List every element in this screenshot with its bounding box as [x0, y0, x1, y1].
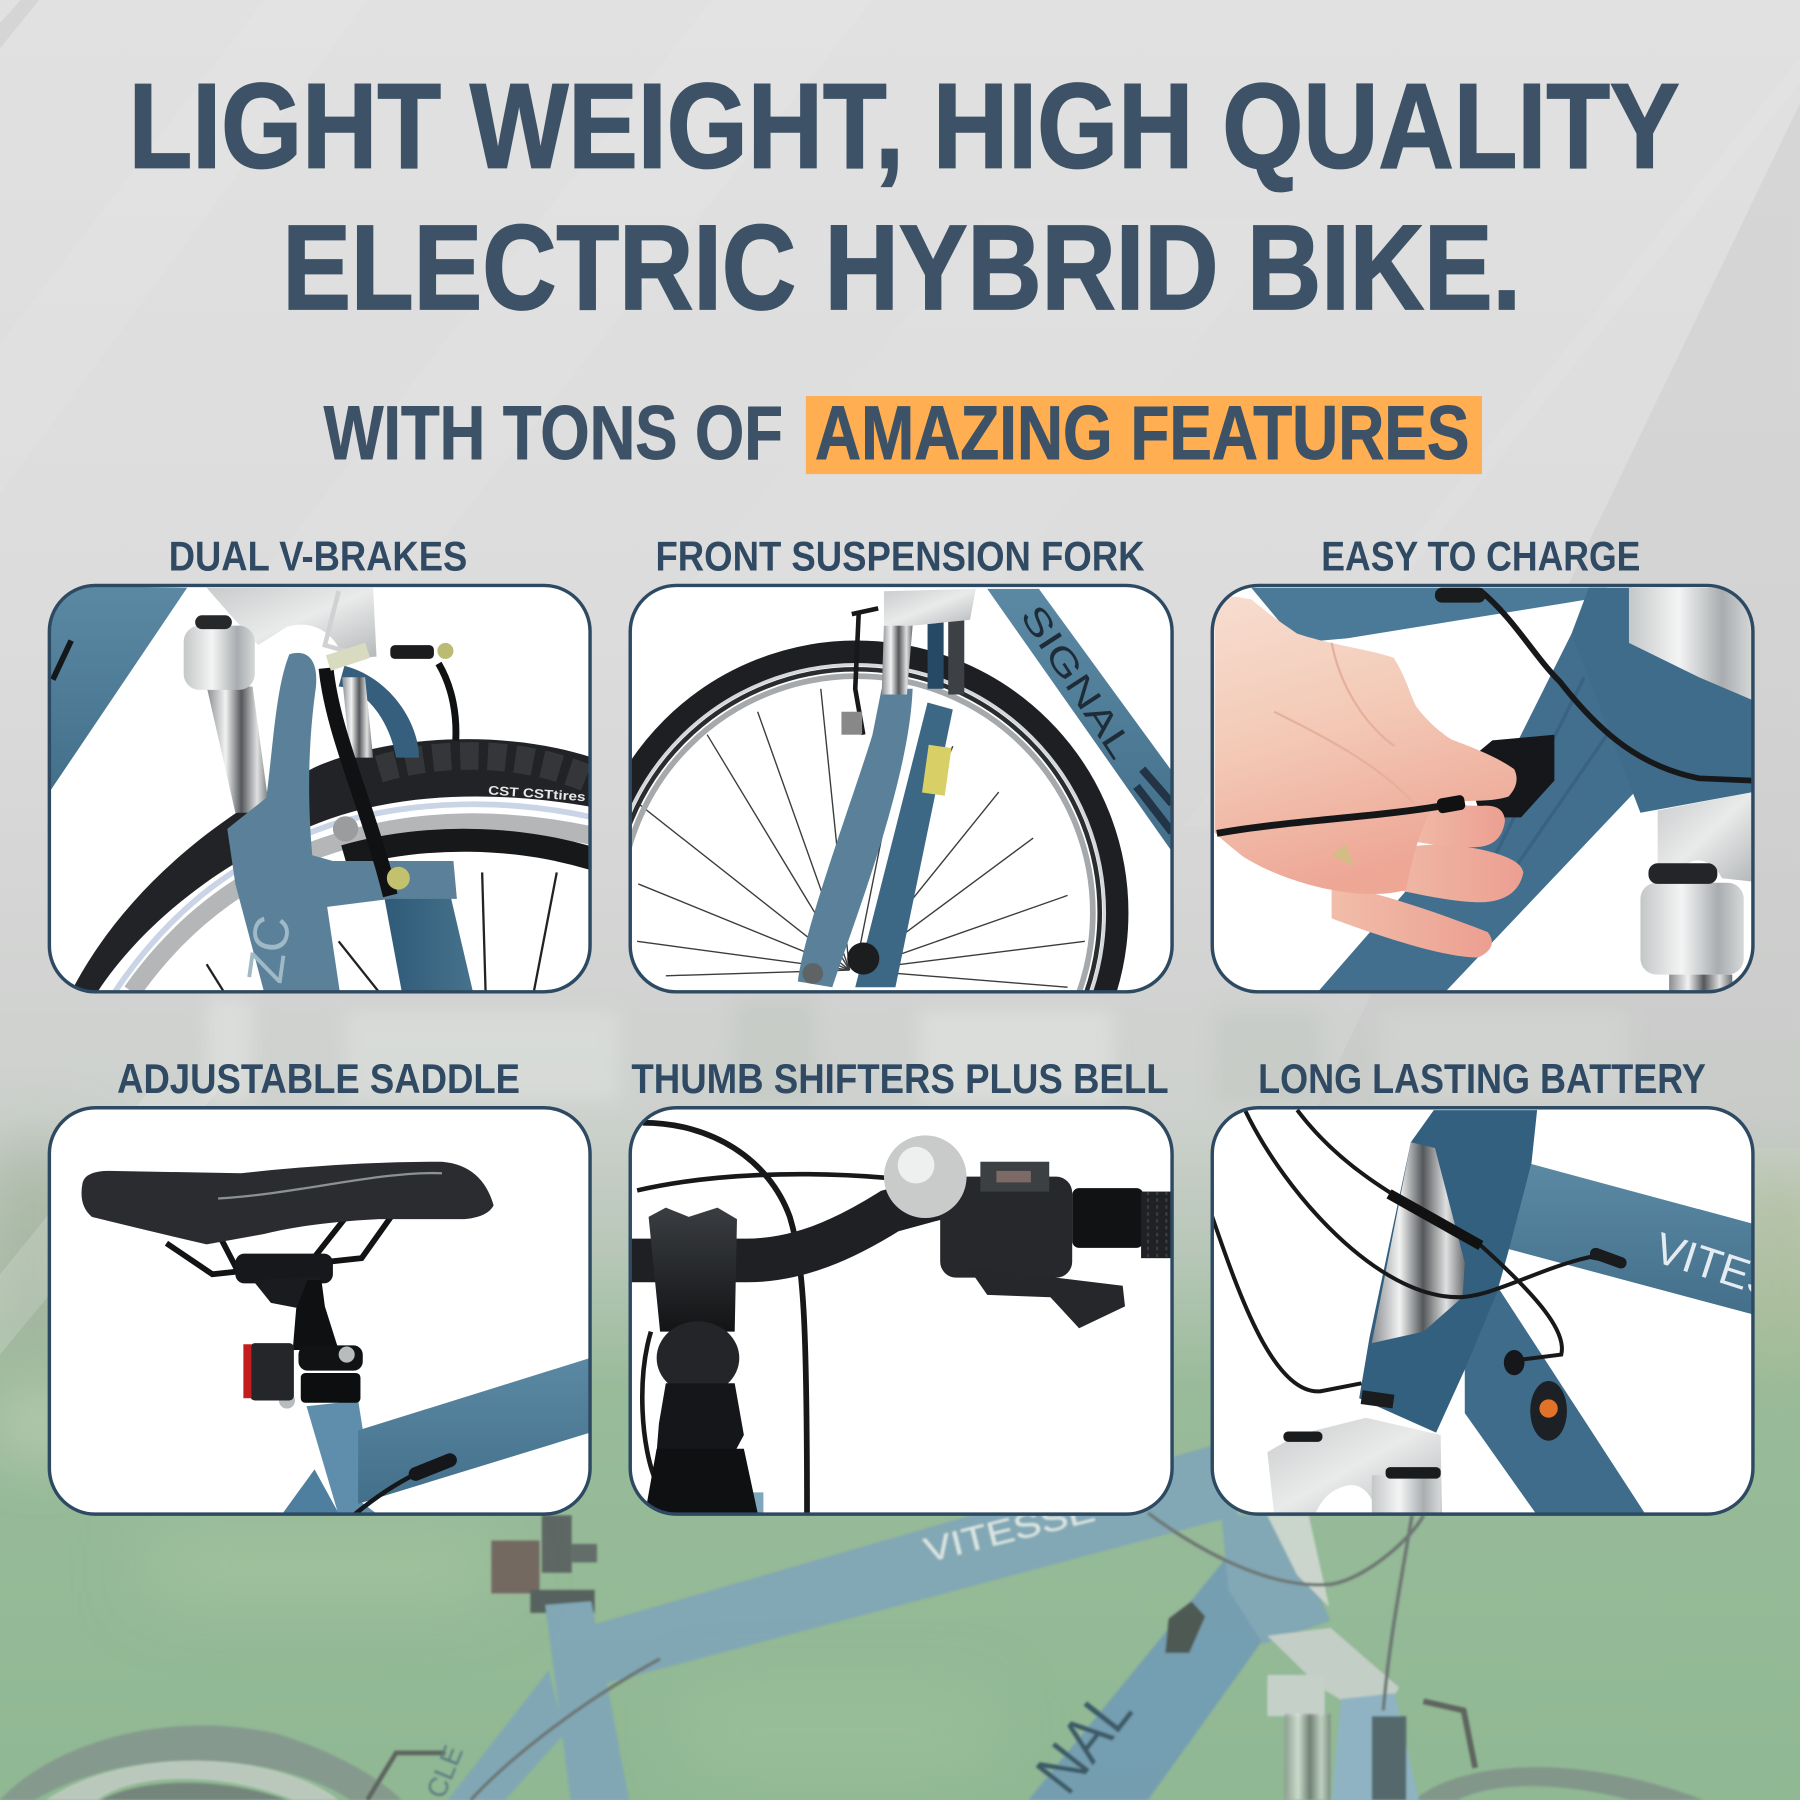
photo: saddle, seat post and frame: [82, 1162, 590, 1515]
photo: head tube, battery indicator and cables: VITES: [1649, 1224, 1784, 1309]
panel: easy to charge: [1212, 534, 1753, 998]
card background: [49, 1108, 590, 1514]
middle finger: [1402, 844, 1524, 902]
back of hand and thumb: [1215, 596, 1517, 894]
card border: [1212, 585, 1753, 992]
brake lever arm rear: [367, 1753, 445, 1800]
front wheel tyre: [1414, 1767, 1704, 1800]
heading: DUAL V-BRAKES: [169, 534, 467, 580]
card background: [630, 585, 1172, 992]
card border: [1212, 1108, 1753, 1514]
brake arm front: [1423, 1701, 1475, 1768]
subtitle: [324, 391, 1482, 476]
photo: fork, brake and tyre: CST CSTtires: [488, 783, 586, 804]
panel: front suspension fork: [628, 542, 1174, 994]
photo: fork, brake and tyre: [49, 585, 592, 992]
top tube: [595, 1444, 1238, 1685]
highlighted text: AMAZING FEATURES: [815, 391, 1469, 476]
photo: hand plugging charger into frame: [1215, 588, 1753, 998]
index finger: [1418, 806, 1505, 848]
panel: long lasting battery: [1212, 1056, 1784, 1521]
rear wheel tyre and rim: [0, 1726, 402, 1800]
pinky and ring fingers: [1332, 884, 1492, 957]
heading: THUMB SHIFTERS PLUS BELL: [631, 1056, 1169, 1102]
heading: EASY TO CHARGE: [1321, 534, 1640, 580]
heading: FRONT SUSPENSION FORK: [655, 534, 1145, 580]
subtitle lead text: WITH TONS OF: [324, 391, 783, 476]
photo: handlebar, stem, bell and shifter: [630, 1123, 1173, 1515]
card border: [49, 585, 590, 992]
orange highlight box: [806, 396, 1482, 474]
card border: [49, 1108, 590, 1514]
card background: [49, 585, 590, 992]
card border: [630, 1108, 1172, 1514]
charge port: [1165, 1601, 1205, 1653]
title line 2: ELECTRIC HYBRID BIKE.: [282, 200, 1521, 335]
card background: [630, 1108, 1172, 1514]
frame logo VITESSE: VITESSE: [920, 1491, 1099, 1570]
photo: front wheel and fork: SIGNAL: [1013, 598, 1141, 766]
card border: [630, 585, 1172, 992]
heading: LONG LASTING BATTERY: [1258, 1056, 1706, 1102]
seat tube: [545, 1601, 629, 1800]
brake cables: [471, 1513, 1423, 1800]
panel: adjustable saddle: [49, 1056, 590, 1515]
panel: thumb shifters plus bell: [630, 1056, 1173, 1515]
seat stay: [448, 1670, 565, 1800]
title: [129, 59, 1679, 335]
panel: dual v-brakes: [49, 534, 592, 992]
faded bike frame photo at the bottom: [0, 1444, 1704, 1800]
fork crown and stanchion: [1267, 1628, 1419, 1800]
photo: head tube, battery indicator and cables: [1212, 1110, 1784, 1521]
heading: ADJUSTABLE SADDLE: [117, 1056, 520, 1102]
photo: front wheel and fork: [632, 588, 1170, 990]
head tube: [1221, 1515, 1330, 1644]
card background: [1212, 585, 1753, 992]
card background: [1212, 1108, 1753, 1514]
photo: fork, brake and tyre: ZC: [236, 912, 302, 986]
seat post and light: [491, 1515, 597, 1613]
down tube: [1029, 1544, 1274, 1800]
